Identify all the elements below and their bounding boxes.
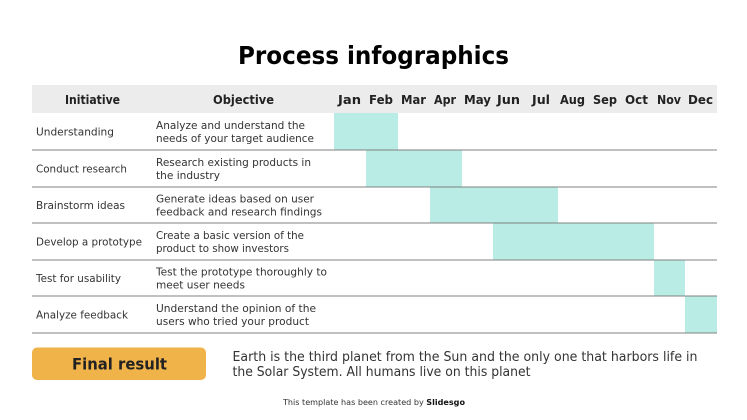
row: test for usability: meet user needs	[156, 280, 245, 292]
row: conduct research: Research existing products in	[156, 157, 311, 169]
row: analyze feedback	[36, 303, 316, 328]
row: understanding: Analyze and understand the	[156, 120, 305, 132]
table header	[32, 85, 717, 113]
title: Process infographics	[238, 41, 509, 70]
description: the Solar System. All humans live on this planet	[232, 365, 530, 380]
row dividers	[32, 150, 717, 334]
row: analyze feedback: Understand the opinion of the	[156, 303, 316, 315]
final result button	[32, 348, 206, 380]
description	[232, 350, 698, 380]
table header: Oct	[625, 93, 648, 107]
row: conduct research: the industry	[156, 170, 220, 182]
table header: May	[464, 93, 491, 107]
table header: Jun	[496, 93, 520, 107]
final result button: Final result	[72, 354, 167, 374]
row: test for usability: Test the prototype thoroughly to	[155, 266, 327, 278]
row: conduct research: Conduct research	[36, 164, 127, 176]
row: develop a prototype	[36, 230, 304, 255]
row: brainstorm ideas	[36, 194, 322, 218]
row: develop a prototype: Create a basic version of the	[156, 230, 304, 242]
description: Earth is the third planet from the Sun and the only one that harbors life in	[232, 350, 698, 365]
table header: Feb	[369, 93, 393, 107]
table header: Apr	[434, 93, 456, 107]
row: brainstorm ideas: Generate ideas based on user	[156, 194, 315, 206]
row: analyze feedback: users who tried your product	[156, 316, 309, 328]
row: brainstorm ideas: Brainstorm ideas	[36, 200, 125, 212]
row: analyze feedback: Analyze feedback	[36, 310, 129, 322]
table header: Sep	[593, 93, 617, 107]
gantt bars	[334, 113, 717, 333]
credit: This template has been created by Slidesgo	[282, 398, 465, 407]
row: conduct research	[36, 157, 311, 182]
row: develop a prototype: product to show investors	[156, 243, 289, 255]
row: test for usability	[35, 266, 327, 292]
table header: Dec	[688, 93, 713, 107]
row: develop a prototype: Develop a prototype	[36, 236, 142, 248]
table header: Jul	[531, 93, 550, 107]
row: understanding: needs of your target audience	[156, 133, 314, 145]
row: brainstorm ideas: feedback and research findings	[156, 206, 322, 218]
table header: Objective	[213, 93, 274, 107]
table header: Jan	[337, 93, 361, 107]
row: understanding: Understanding	[36, 126, 114, 138]
table header: Nov	[657, 93, 681, 107]
table header: Initiative	[65, 93, 120, 107]
row: test for usability: Test for usability	[35, 273, 121, 285]
row: understanding	[36, 120, 314, 145]
table header: Mar	[401, 93, 426, 107]
table header: Aug	[560, 93, 585, 107]
